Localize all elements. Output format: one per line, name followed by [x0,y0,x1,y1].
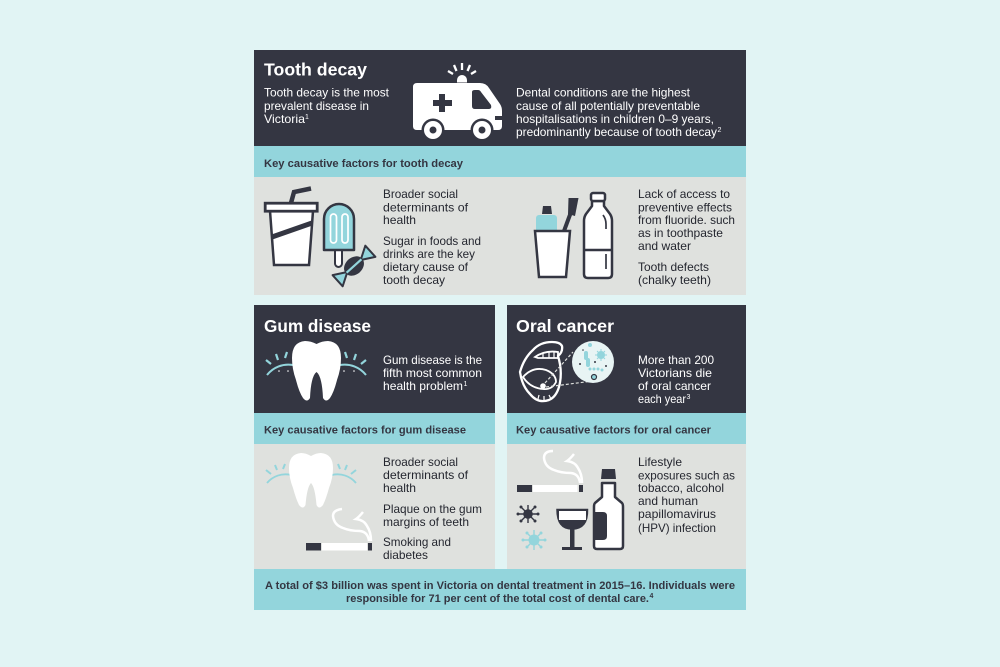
icon: wine glass [557,510,588,550]
text: fifth most common: 1 [464,381,468,388]
heading: key factors gum disease: Key causative factors for gum disease [264,424,466,436]
text: social determinants and sugar: dietary cause of [383,260,469,274]
icon: mouth with magnified cells [520,341,614,401]
text: fluoride and tooth defects: preventive effects [638,200,732,214]
text: lifestyle exposures: papillomavirus [638,507,716,521]
text: social determinants and sugar: tooth decay [383,273,445,287]
text: social determinants and sugar: Broader social [383,187,458,201]
heading: oral cancer: Oral cancer [516,316,614,336]
icon: ambulance [413,63,502,142]
text: lifestyle exposures: and human [638,494,698,508]
text: fifth most common [383,353,482,393]
text: gum disease factors: determinants of [383,468,469,482]
text: more than 200: each year [638,392,686,406]
text: gum disease factors: margins of teeth [383,515,469,529]
callout: total cost: responsible for 71 per cent of the total cost of dental care. [346,593,649,605]
icon: drink cup [265,188,317,265]
text: social determinants and sugar: health [383,213,416,227]
text: fifth most common: health problem [383,379,463,393]
heading: key factors oral cancer: Key causative factors for oral cancer [516,424,712,436]
icon: dark virus [516,505,540,523]
icon: tooth with gums [266,341,366,400]
panel: tooth decay [254,50,746,295]
text: lifestyle exposures: tobacco, alcohol [638,481,724,495]
icon: tooth on grey [266,453,356,508]
text: dental conditions: predominantly because of tooth decay [516,125,717,139]
text: more than 200: More than 200 [638,353,714,367]
text: gum disease factors: diabetes [383,548,428,562]
text: gum disease factors: Smoking and [383,535,451,549]
icon: ice block [324,204,354,267]
text: social determinants and sugar: determinants of [383,200,469,214]
panel: gum disease [254,305,495,569]
text: gum disease factors [383,455,482,562]
text: more than 200 [638,353,714,406]
text: gum disease factors: Broader social [383,455,458,469]
text: most prevalent disease: 1 [305,114,309,121]
text: lifestyle exposures [638,455,735,535]
text: fifth most common: fifth most common [383,366,482,380]
text: dental conditions: hospitalisations in children 0–9 years, [516,112,714,126]
text: dental conditions: Dental conditions are the highest [516,86,691,100]
text: fluoride and tooth defects: Tooth defects [638,260,709,274]
text: dental conditions: cause of all potentially preventable [516,99,700,113]
text: more than 200: Victorians die [638,366,712,380]
icon: teal virus [522,530,546,550]
callout: total cost: A total of $3 billion was spent in Victoria on dental treatment in 2015–16. Individuals were [265,580,735,592]
text: dental conditions [516,86,722,139]
text: fluoride and tooth defects [638,187,735,287]
icon: toothbrush and mouthwash in cup [535,198,578,277]
text: fluoride and tooth defects: as in toothpaste [638,226,723,240]
text: dental conditions: 2 [718,127,722,134]
text: lifestyle exposures: exposures such as [638,468,735,482]
text: lifestyle exposures: (HPV) infection [638,521,716,535]
text: more than 200: of oral cancer [638,379,711,393]
callout: total cost [254,569,746,610]
panel: oral cancer [507,305,746,569]
text: gum disease factors: Plaque on the gum [383,502,482,516]
callout: total cost: 4 [650,593,654,600]
text: most prevalent disease: Tooth decay is the most [264,86,390,100]
icon: alcohol bottle [594,469,623,549]
text: social determinants and sugar: Sugar in foods and [383,234,481,248]
icon: water bottle [584,193,612,278]
text: social determinants and sugar [383,187,481,287]
text: lifestyle exposures: Lifestyle [638,455,682,469]
icon: cigarette with smoke [306,509,372,550]
heading: tooth decay: Tooth decay [264,60,367,80]
text: fifth most common: Gum disease is the [383,353,482,367]
text: fluoride and tooth defects: from fluoride. such [638,213,735,227]
heading: gum disease: Gum disease [264,316,371,336]
icon: candy [332,245,376,287]
text: most prevalent disease: prevalent disease in [264,99,369,113]
heading: key factors tooth decay: Key causative factors for tooth decay [264,158,464,170]
text: social determinants and sugar: drinks are the key [383,247,475,261]
text: most prevalent disease [264,86,390,126]
text: fluoride and tooth defects: (chalky teeth) [638,273,711,287]
icon: cigarette with smoke [517,451,583,492]
text: more than 200: 3 [686,394,690,401]
text: fluoride and tooth defects: Lack of access to [638,187,730,201]
text: most prevalent disease: Victoria [264,112,305,126]
text: gum disease factors: health [383,481,416,495]
text: fluoride and tooth defects: and water [638,239,691,253]
